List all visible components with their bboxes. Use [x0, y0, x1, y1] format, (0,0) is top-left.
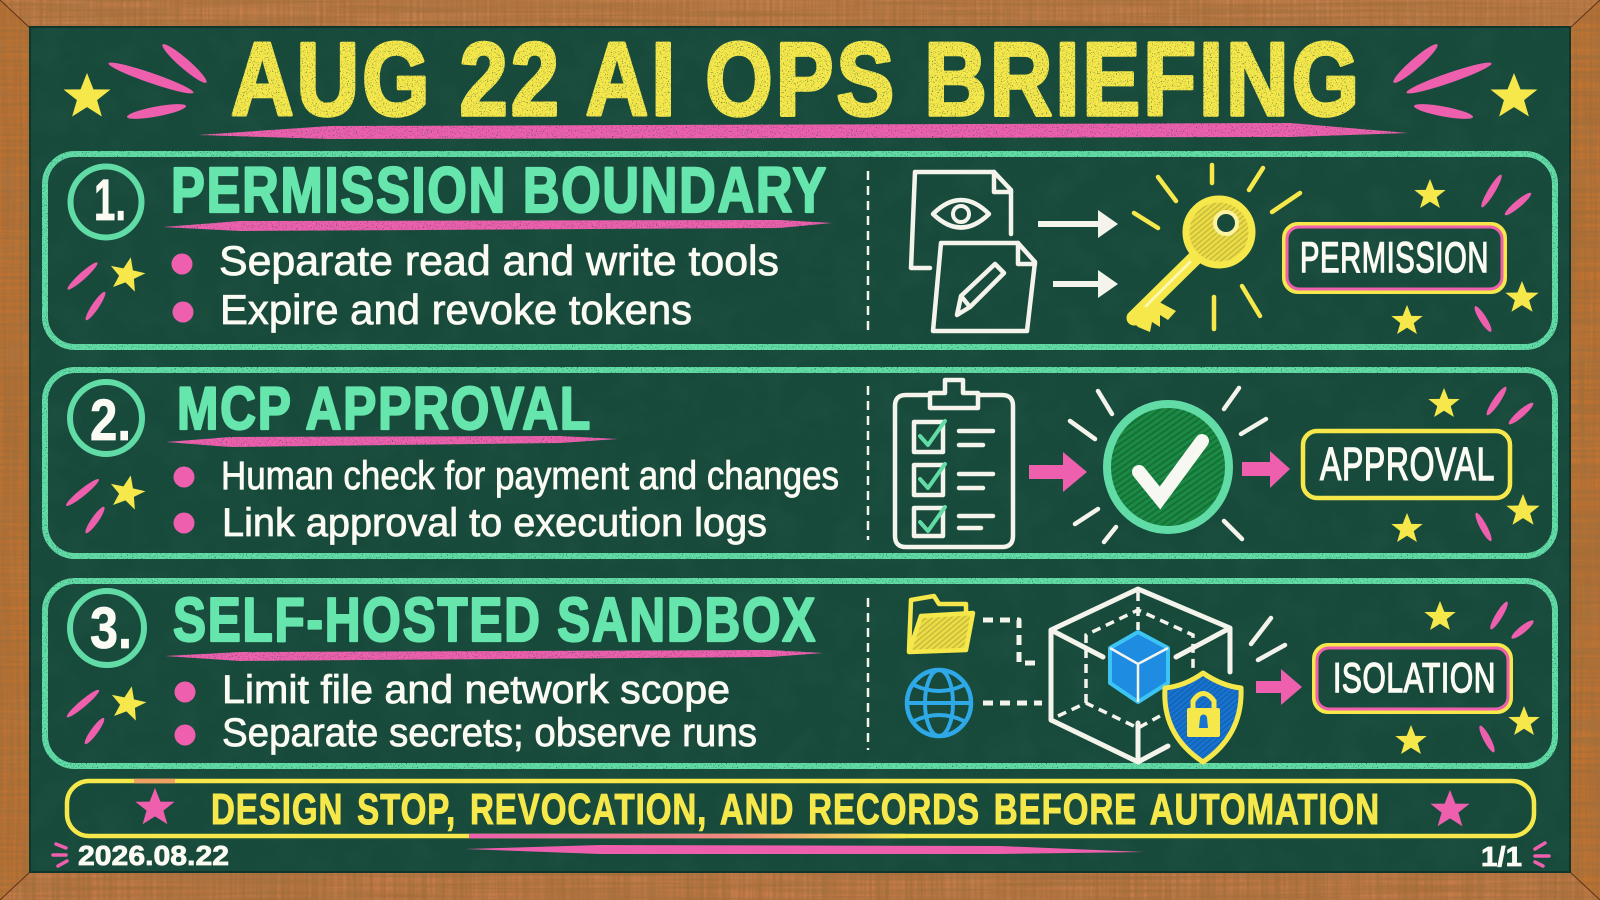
banner star right [1430, 790, 1470, 826]
number badge 2 [70, 382, 142, 454]
spark lines [1251, 618, 1285, 660]
bullet list: Link approval to execution logs [222, 501, 767, 545]
dashed connector: globe [983, 700, 1042, 706]
left sparkles [64, 472, 148, 535]
right sparkles [1391, 173, 1539, 334]
panel 1: permission boundary [45, 154, 1555, 347]
icon: read document [911, 172, 1011, 268]
number badge 1: 1. [94, 168, 126, 233]
icon: globe [907, 670, 971, 736]
heading: mcp approval: MCP APPROVAL [177, 375, 592, 442]
divider [867, 171, 869, 332]
arrow: sandbox to badge [1256, 669, 1302, 705]
title decoration: left [63, 41, 210, 122]
title decoration: right [1390, 41, 1538, 122]
badge: approval: APPROVAL [1320, 438, 1495, 490]
bullet list: Human check for payment and changes [221, 454, 839, 498]
badge: permission: PERMISSION [1300, 234, 1489, 282]
right sparkles [1391, 385, 1540, 543]
icon: checklist clipboard [895, 380, 1013, 547]
footer page number [1481, 841, 1549, 872]
arrow: check to badge [1242, 451, 1290, 488]
heading underline [166, 436, 618, 447]
badge: approval [1303, 431, 1510, 498]
footer date: 2026.08.22 [78, 840, 229, 871]
icon: sandbox cube [1051, 589, 1230, 762]
arrow: read to key [1038, 210, 1118, 238]
blue inner cube [1110, 632, 1168, 702]
icon: security shield [1165, 673, 1241, 762]
number badge 3: 3. [90, 596, 132, 661]
banner underline [465, 845, 1145, 854]
banner star left [135, 788, 175, 824]
icon: approved check circle [1070, 388, 1266, 542]
arrow: write to key [1053, 270, 1118, 298]
heading: permission boundary: PERMISSION BOUNDARY [171, 154, 828, 226]
bullet list [174, 454, 839, 545]
takeaway banner [67, 781, 1534, 836]
panel 3: self-hosted sandbox [45, 581, 1555, 766]
heading underline [165, 650, 823, 661]
title underline [198, 123, 1408, 139]
badge: isolation [1314, 645, 1511, 712]
number badge 3 [70, 591, 144, 665]
bullet list: Separate read and write tools [219, 237, 779, 284]
badge: permission [1284, 224, 1505, 292]
arrow: checklist to check [1029, 452, 1087, 492]
icon: write document [933, 243, 1035, 331]
divider [867, 386, 869, 540]
icon: key [1128, 165, 1300, 332]
title: AUG 22 AI OPS BRIEFING [231, 22, 1362, 138]
left sparkles [65, 683, 149, 746]
heading: self-hosted sandbox: SELF-HOSTED SANDBOX [173, 586, 817, 655]
heading underline [163, 220, 832, 231]
badge: isolation: ISOLATION [1333, 654, 1496, 701]
bullet list [174, 668, 757, 755]
divider [867, 598, 869, 750]
footer page number: 1/1 [1481, 841, 1522, 872]
right sparkles [1395, 600, 1540, 754]
bullet list: Limit file and network scope [222, 668, 730, 712]
icon: folder [909, 596, 973, 652]
dashed connector: folder [983, 620, 1042, 663]
number badge 1 [70, 166, 142, 238]
bullet list [172, 237, 779, 333]
number badge 2: 2. [90, 388, 131, 453]
panel 2: mcp approval [45, 370, 1555, 556]
left sparkles [65, 254, 148, 322]
padlock [1187, 694, 1220, 737]
bullet list: Separate secrets; observe runs [222, 711, 757, 755]
bullet list: Expire and revoke tokens [220, 286, 692, 333]
